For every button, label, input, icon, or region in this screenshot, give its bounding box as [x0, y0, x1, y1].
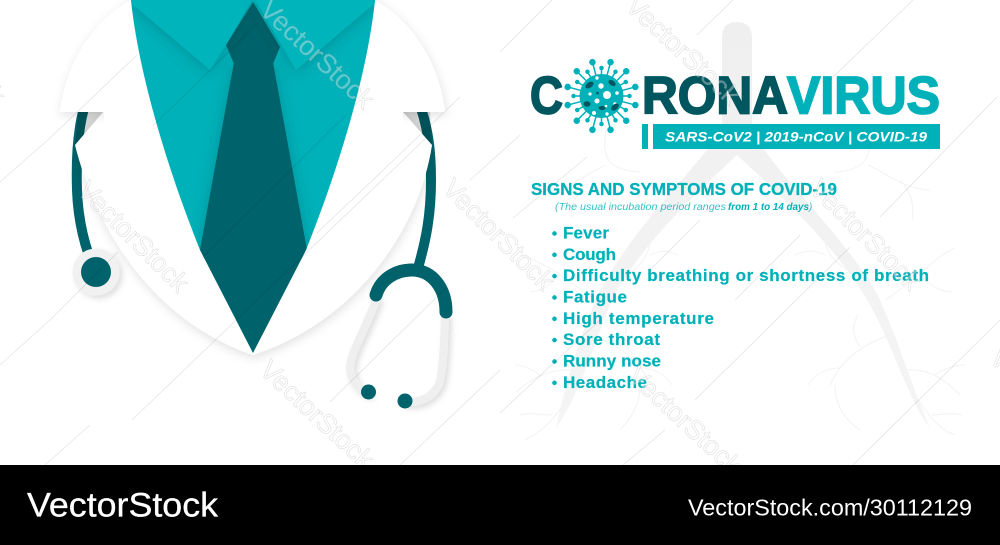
footer brand: VectorStock [27, 486, 219, 524]
title: C [530, 66, 563, 126]
watermarks: VectorStock [622, 360, 748, 481]
subtitle banner [653, 124, 940, 149]
symptoms list: Fatigue [563, 288, 627, 306]
earpieces tubes [350, 300, 445, 402]
symptoms list: Runny nose [563, 352, 661, 370]
incubation note: (The usual incubation period ranges [555, 202, 726, 213]
symptoms list: Headache [563, 373, 647, 392]
footer bar [0, 465, 1000, 545]
symptoms list: Sore throat [563, 330, 660, 349]
stethoscope right tube [418, 108, 431, 268]
watermarks: VectorStock [437, 173, 560, 296]
subtitle banner accent [642, 124, 648, 149]
collar shadow left [75, 112, 104, 145]
title: VIRUS [787, 66, 940, 126]
teal shirt [125, 0, 381, 360]
collar shadow right [403, 112, 432, 145]
tie knot [226, 2, 280, 64]
title [530, 66, 940, 126]
symptoms list: High temperature [563, 309, 714, 328]
watermarks: VectorStock [804, 173, 927, 296]
watermarks: VectorStock [254, 354, 380, 475]
symptoms heading: SIGNS AND SYMPTOMS OF COVID-19 [531, 179, 837, 199]
right collar [254, 0, 381, 70]
left sleeve [60, 0, 160, 112]
right sleeve [345, 0, 445, 112]
chest piece [72, 248, 120, 296]
tie body [200, 62, 307, 353]
coat centre cover [103, 100, 403, 350]
incubation note: ) [808, 202, 812, 213]
title: RONA [642, 66, 788, 126]
lungs illustration [515, 22, 965, 440]
watermarks: VectorStock [72, 175, 195, 298]
symptoms list: Cough [563, 245, 616, 264]
symptoms list: Difficulty breathing or shortness of breath [563, 266, 929, 285]
ear tips [361, 384, 412, 408]
symptoms list: Fever [563, 224, 609, 242]
symptoms list [552, 224, 929, 392]
subtitle banner: SARS-CoV2 | 2019-nCoV | COVID-19 [665, 128, 927, 144]
stethoscope yoke [376, 270, 446, 312]
virus icon [565, 59, 638, 133]
doctor coat [75, 0, 432, 355]
stethoscope left tube [77, 108, 96, 272]
left collar [125, 0, 253, 70]
incubation note [555, 202, 812, 213]
footer image id: VectorStock.com/30112129 [688, 494, 972, 520]
incubation note: from 1 to 14 days [728, 202, 809, 213]
